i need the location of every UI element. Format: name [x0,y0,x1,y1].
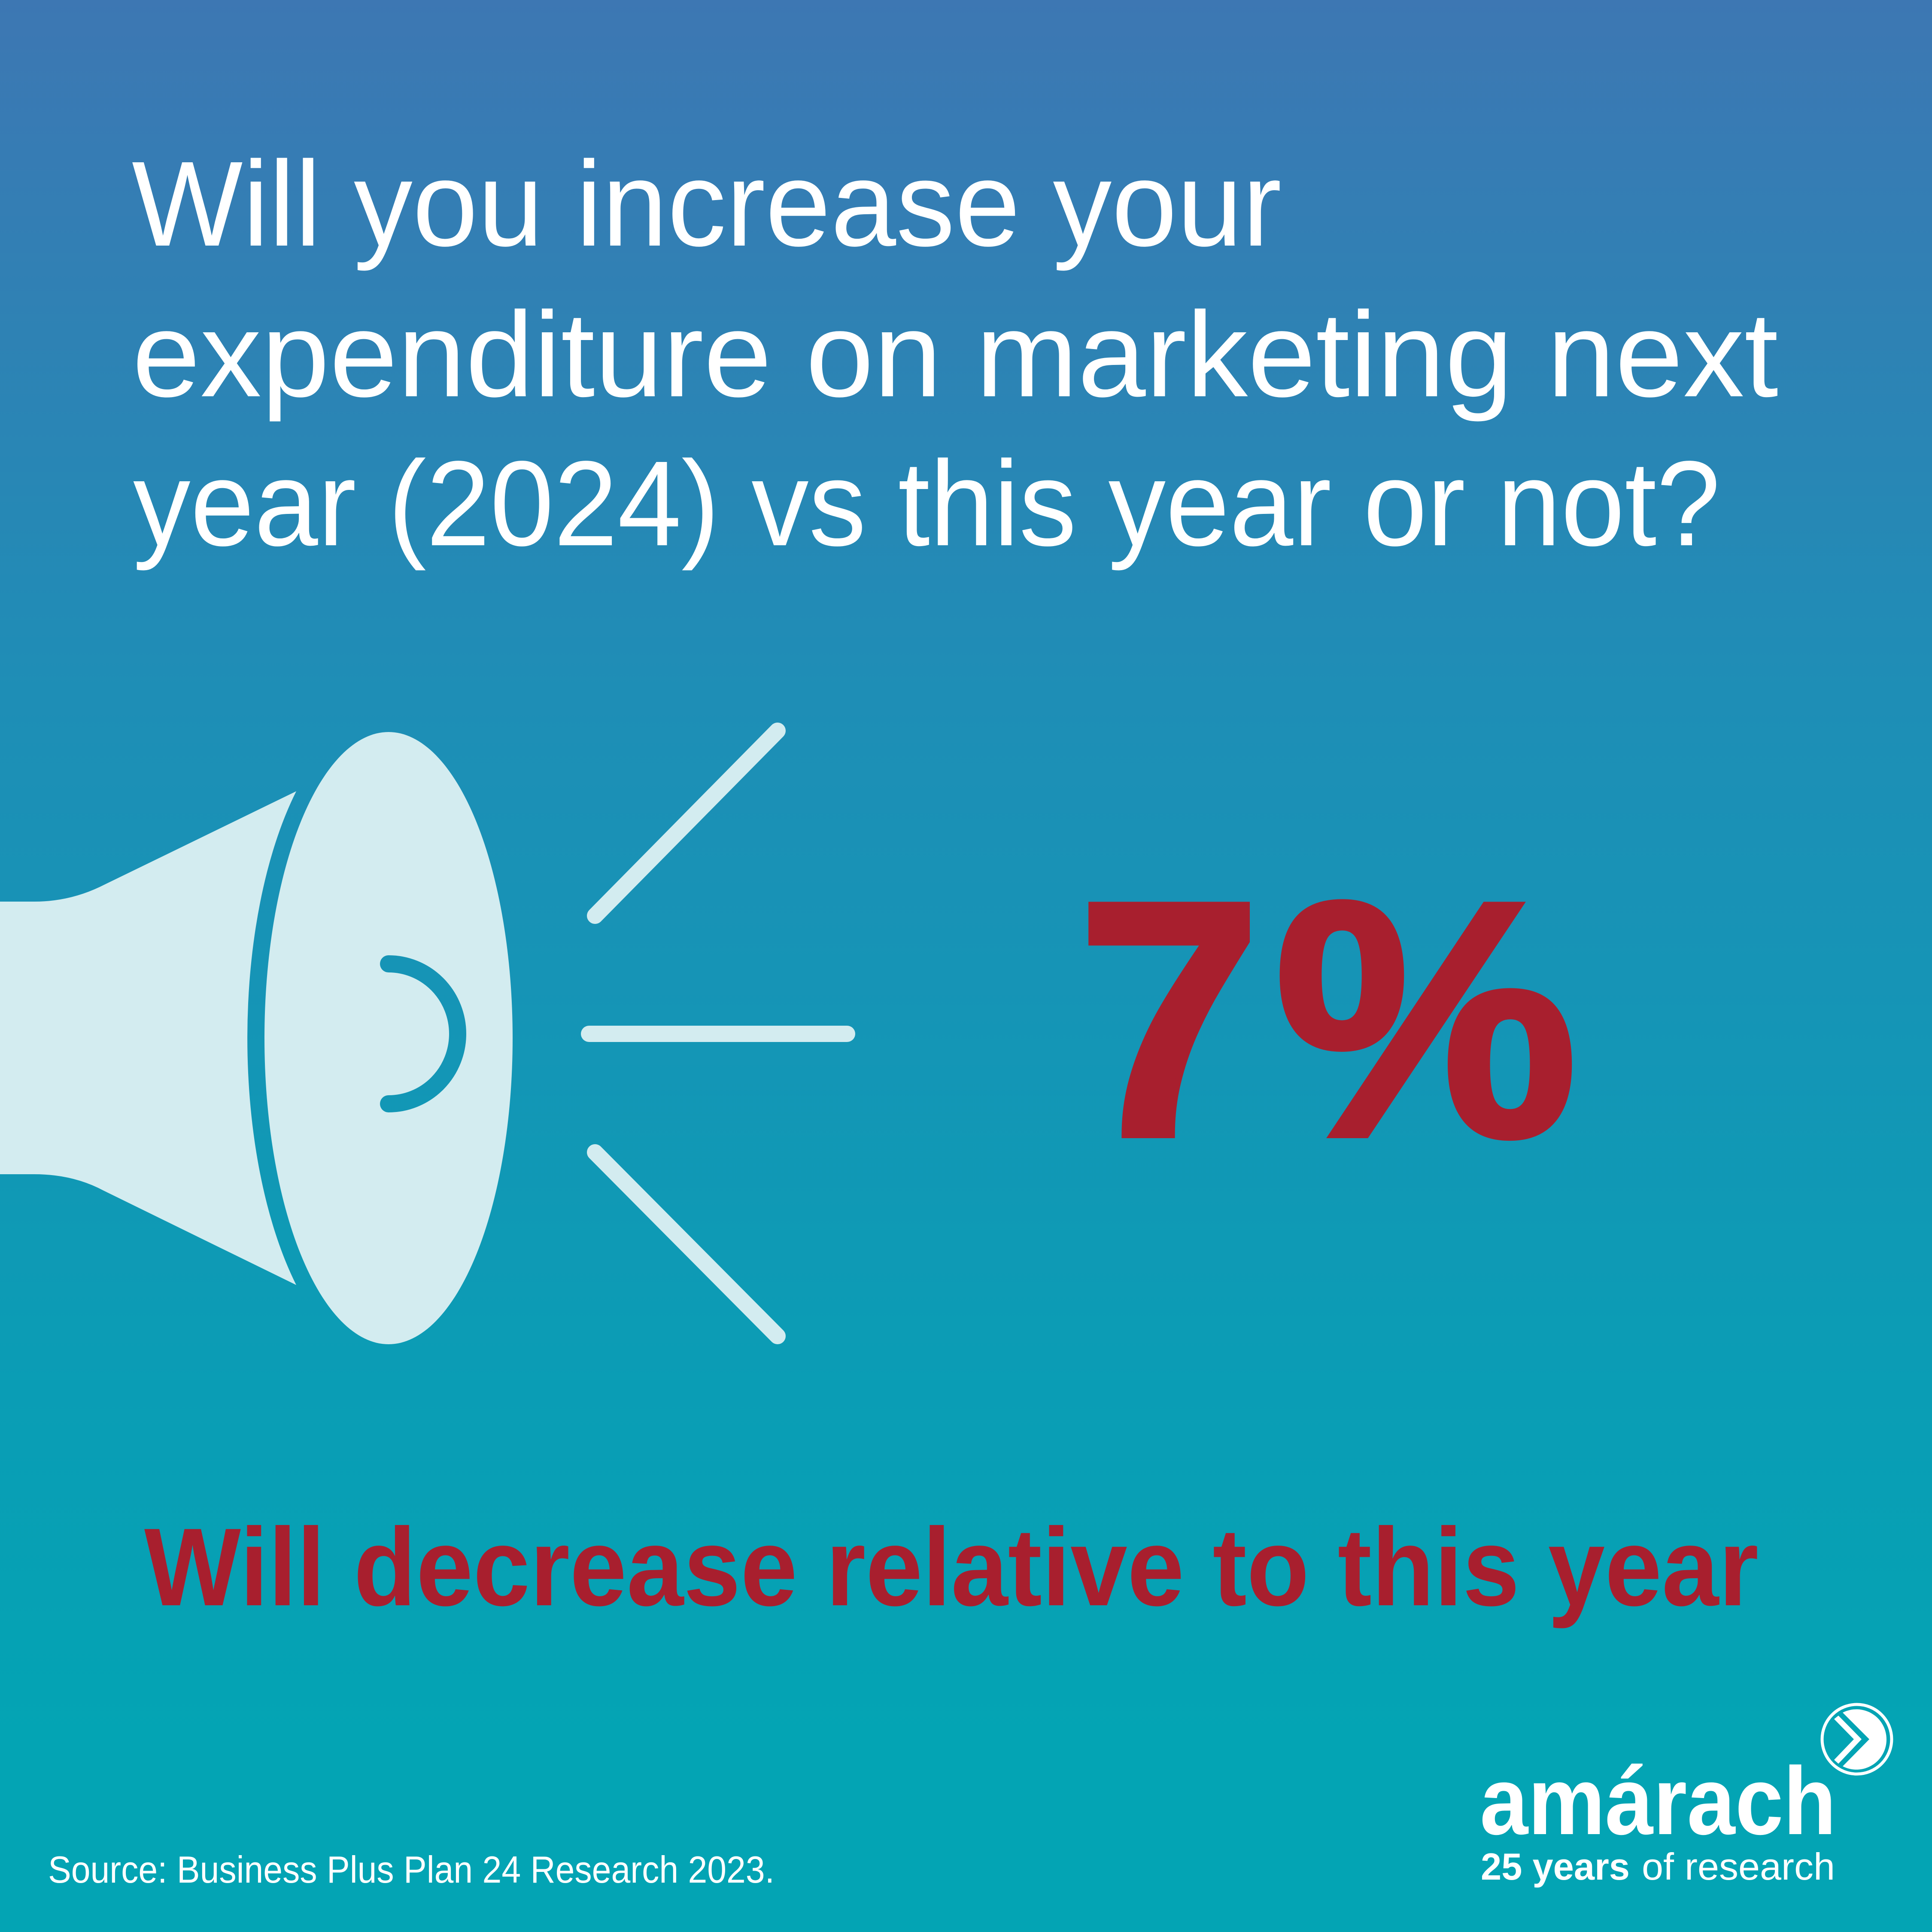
big percentage [1077,832,1578,1206]
title: expenditure on marketing next [132,287,1779,423]
title: Will you increase your [132,136,1282,272]
logo emblem [1822,1704,1892,1774]
logo tagline regular: of research [1642,1845,1835,1888]
megaphone horn [0,791,296,1285]
source note: Source: Business Plus Plan 24 Research 2023. [48,1848,775,1891]
title: year (2024) vs this year or not? [133,436,1720,572]
logo: amarach [1480,1704,1892,1888]
big percentage: 7 [1077,832,1261,1206]
big percentage: % [1274,832,1578,1206]
logo wordmark: amárach [1480,1747,1836,1855]
icon: megaphone [0,732,513,1344]
megaphone inner arc [389,964,458,1104]
megaphone bell [264,732,513,1344]
logo tagline bold: 25 years [1481,1845,1630,1888]
icon: sound rays [589,731,847,1336]
statement: Will decrease relative to this year [144,1505,1759,1629]
title [132,136,1779,572]
